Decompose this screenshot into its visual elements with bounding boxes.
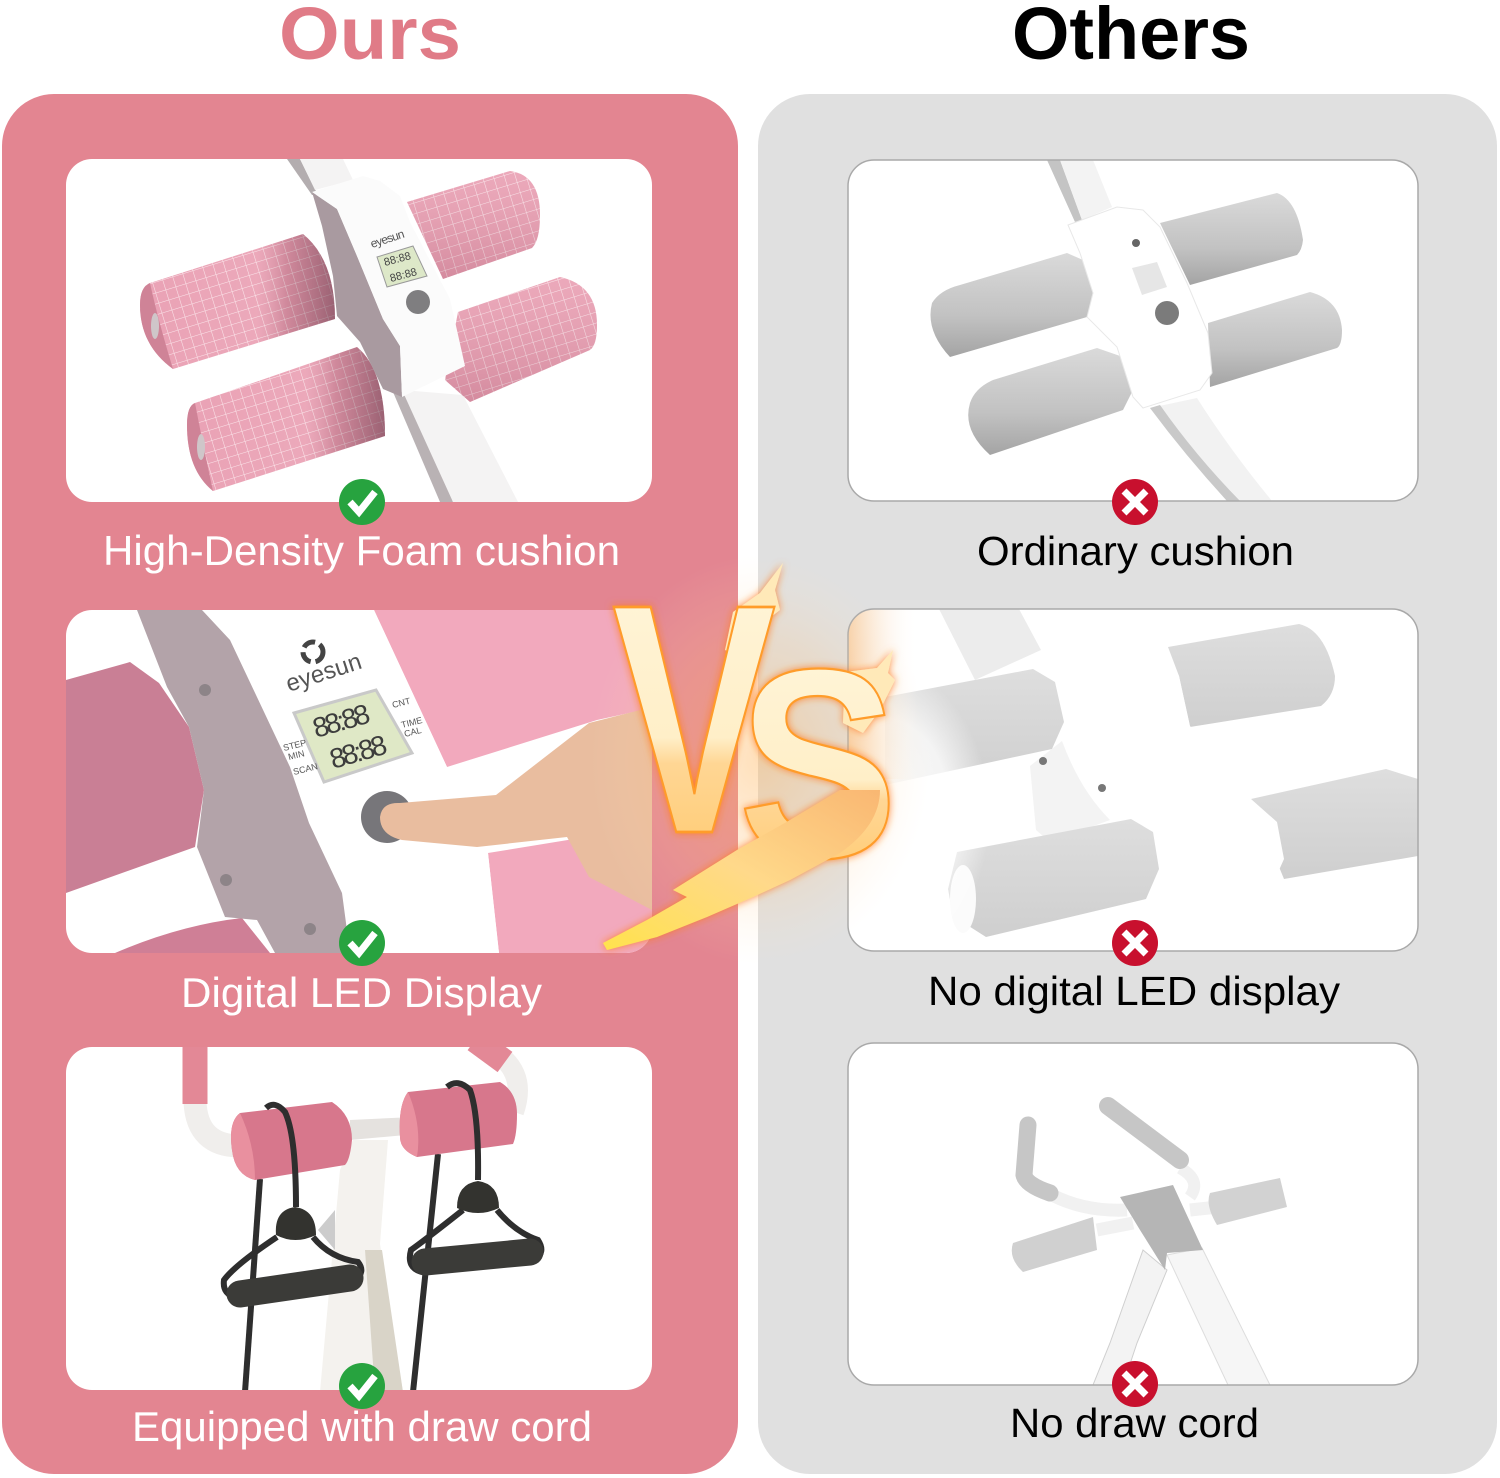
icon: cross 2 (1112, 920, 1158, 966)
panel: ours background (2, 94, 738, 1474)
left roller (1012, 1217, 1097, 1272)
flame wisps (725, 563, 895, 733)
left handle with cord (224, 1105, 361, 1298)
left leg (1093, 1250, 1167, 1385)
crossbar (350, 1118, 400, 1140)
right handle with cord (410, 1083, 541, 1272)
upper left cushion (930, 253, 1095, 357)
letter V: V (612, 537, 777, 902)
gray side plate (137, 610, 350, 953)
left pink roller (231, 1102, 352, 1180)
frame column (318, 1140, 403, 1392)
card: high-density foam cushion (66, 159, 652, 502)
caption: equipped with draw cord: Equipped with draw cord (132, 1403, 592, 1450)
panel: others background (758, 94, 1497, 1474)
left dark roller (66, 662, 204, 893)
card: draw cord (66, 1040, 652, 1392)
lcd screen (377, 246, 427, 287)
card: digital led display (66, 610, 652, 953)
right handlebar (475, 1040, 518, 1112)
icon: cross 3 (1112, 1361, 1158, 1407)
right leg (1167, 1248, 1270, 1385)
right back cord (413, 1154, 438, 1392)
eyesun logo: eyesun (283, 648, 365, 698)
burst whitening (770, 665, 990, 965)
card border (848, 160, 1418, 501)
roller end cap (950, 865, 976, 933)
upper right cushion (1160, 193, 1303, 285)
upper right foam roller (407, 171, 540, 279)
lower right roller (1251, 769, 1418, 879)
white bracket (1068, 207, 1212, 408)
large upper pink roller (374, 610, 652, 767)
lcd labels: MIN (287, 748, 305, 762)
button (406, 290, 430, 314)
left handlebar (195, 1047, 240, 1146)
blank display (1132, 262, 1167, 295)
button (361, 791, 413, 843)
icon: check 3 (339, 1363, 385, 1409)
lower rail (393, 392, 453, 502)
upper rail (287, 159, 318, 195)
white bracket (1017, 637, 1284, 954)
upper right roller (1168, 624, 1335, 727)
lcd labels: CNT (391, 696, 412, 710)
screws (199, 684, 316, 935)
caption: ordinary cushion: Ordinary cushion (977, 528, 1294, 574)
lower rail (1161, 398, 1271, 500)
right roller (1209, 1178, 1287, 1225)
brand text: eyesun (369, 227, 406, 251)
caption: digital led display: Digital LED Display (181, 969, 542, 1016)
button (1155, 301, 1179, 325)
screws (1039, 757, 1106, 792)
lcd display: 88:88 (309, 698, 373, 744)
white bracket (312, 176, 465, 397)
lcd labels: STEP (282, 738, 307, 753)
back rail (939, 609, 1041, 680)
left back cord (245, 1179, 260, 1392)
caption: no digital led display: No digital LED display (928, 968, 1341, 1014)
lcd screen: 88:88 (389, 266, 418, 285)
lcd labels: SCAN (292, 761, 319, 777)
lcd labels: CAL (403, 725, 422, 739)
lower left roller (948, 819, 1159, 937)
lower pink roller (115, 918, 270, 953)
lcd display: 88:88 (326, 729, 390, 775)
vs burst glow (590, 555, 930, 965)
caption: no draw cord: No draw cord (1010, 1400, 1259, 1446)
gray grips (1024, 1106, 1180, 1193)
white front plate (374, 610, 499, 952)
card border (848, 1043, 1418, 1385)
icon: check 1 (339, 479, 385, 525)
upper rail (1047, 160, 1082, 222)
lower left foam roller (187, 347, 385, 491)
finger and hand (380, 707, 652, 910)
white tubes (1052, 1168, 1218, 1230)
icon: check 2 (339, 920, 385, 966)
inner shadow (1030, 741, 1110, 842)
center plate (1120, 1185, 1203, 1270)
vs flame logo (603, 537, 898, 950)
gray side plate (312, 192, 402, 397)
caption: high-density foam cushion: High-Density Foam cushion (103, 527, 620, 574)
right pink roller (400, 1082, 517, 1157)
lcd labels: TIME (400, 715, 423, 730)
upper left roller (885, 669, 1064, 785)
lower left cushion (968, 348, 1133, 455)
warm tint (848, 609, 918, 779)
upper left foam roller (140, 234, 335, 369)
lower right cushion (1208, 292, 1342, 387)
icon: cross 1 (1112, 479, 1158, 525)
card: ordinary cushion (848, 160, 1418, 501)
lcd labels (282, 696, 423, 777)
letter S: S (738, 614, 898, 915)
lcd screen: 88:88 (383, 250, 412, 269)
card: no digital led display (770, 609, 1418, 965)
flame tail (603, 790, 880, 950)
lower right foam roller (445, 277, 597, 402)
card border (848, 609, 1418, 951)
logo dot (1132, 239, 1140, 247)
lower right pink roller (488, 840, 652, 953)
card: no draw cord (848, 1043, 1418, 1385)
lcd display (294, 690, 412, 782)
